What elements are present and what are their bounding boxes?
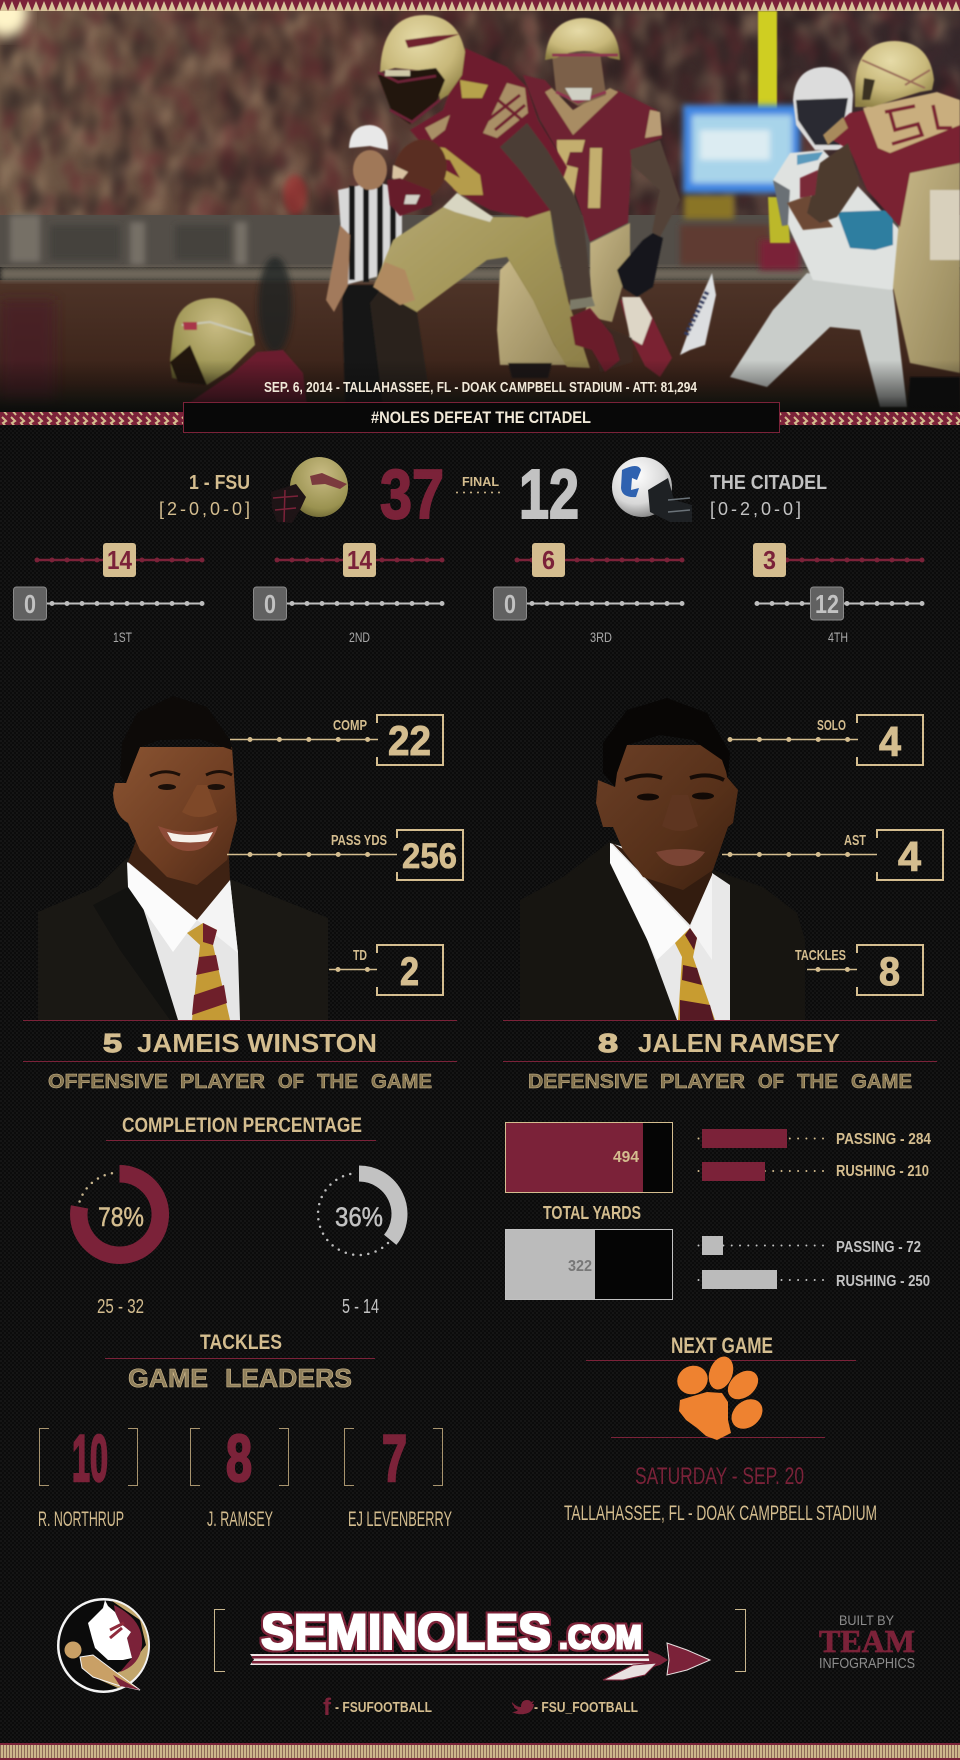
Citadel rushing: RUSHING - 250 <box>836 1273 930 1290</box>
heading: COMPLETION PERCENTAGE <box>122 1114 362 1137</box>
stat: pass yds: 256 <box>402 837 457 876</box>
heading: TACKLES <box>200 1331 282 1354</box>
player name: 5 <box>103 1028 122 1058</box>
panel: next game <box>564 1333 877 1525</box>
Citadel total yards bar <box>506 1230 672 1300</box>
player name <box>503 1020 937 1062</box>
lineman number 54 <box>787 41 960 410</box>
referee <box>326 125 402 410</box>
logo: Seminoles.com wordmark <box>250 1604 710 1680</box>
stat: comp <box>230 715 443 765</box>
stat: ast <box>722 830 943 880</box>
quarter 4: 3 <box>763 545 776 575</box>
social: facebook: f <box>323 1694 332 1721</box>
built by team infographics: TEAM <box>819 1623 915 1659</box>
stat: ast: AST <box>844 832 866 849</box>
headline banner <box>184 402 780 432</box>
bottom fade of photo <box>0 360 960 412</box>
opposing player in white <box>680 67 907 407</box>
donut: FSU 78%: 25 - 32 <box>97 1296 144 1318</box>
bracket right <box>735 1610 746 1672</box>
stat: tackles <box>795 945 923 995</box>
stat: tackles: TACKLES <box>795 947 846 964</box>
top decorative band <box>0 0 960 11</box>
Citadel total yards bar: 322 <box>568 1258 592 1275</box>
quarter 3: 0 <box>504 589 516 619</box>
bottom decorative band <box>0 1743 960 1760</box>
FSU passing <box>698 1129 931 1148</box>
quarter 2: 2ND <box>349 629 370 645</box>
leader: Northrup: 10 <box>72 1421 108 1495</box>
stat: td: 2 <box>400 950 419 994</box>
total yards label: TOTAL YARDS <box>543 1203 641 1223</box>
award title: OF <box>278 1071 304 1093</box>
game leaders subtitle: LEADERS <box>225 1363 352 1393</box>
game info line: SEP. 6, 2014 - TALLAHASSEE, FL - DOAK CAMPBELL STADIUM - ATT: 81,294 <box>264 380 697 396</box>
stat: solo: SOLO <box>817 717 846 734</box>
donut: Citadel 36% <box>318 1173 399 1318</box>
kneeling player <box>170 298 307 407</box>
quarter 3: 6 <box>542 545 555 575</box>
FSU record: [ 2 - 0 , 0 - 0 ] <box>159 499 250 519</box>
award title <box>48 1071 432 1093</box>
donut: Citadel 36%: 5 - 14 <box>342 1296 379 1318</box>
award title: GAME <box>371 1071 432 1093</box>
stat: pass yds <box>227 830 463 880</box>
award title: OFFENSIVE <box>48 1071 168 1093</box>
donut: FSU 78%: 78% <box>98 1202 144 1232</box>
Citadel team label: THE CITADEL <box>710 472 827 494</box>
teammate number 51 in back <box>497 18 680 378</box>
quarter 4: 4TH <box>828 629 848 645</box>
stat: solo: 4 <box>879 718 902 765</box>
Citadel rushing <box>698 1270 930 1290</box>
logo: Seminoles.com wordmark: .COM <box>559 1618 642 1656</box>
icon: Clemson tiger paw <box>673 1353 768 1440</box>
quarter by quarter scores <box>14 543 923 645</box>
quarter 4 <box>753 543 923 645</box>
stat: comp: COMP <box>333 717 367 734</box>
final label <box>457 474 505 492</box>
runner number 9 <box>370 15 620 407</box>
Citadel passing <box>698 1236 921 1256</box>
photo: Jalen Ramsey <box>520 698 805 1020</box>
social: twitter: - FSU_FOOTBALL <box>534 1700 638 1716</box>
leader: Ramsey: 8 <box>226 1421 252 1495</box>
award title: THE <box>317 1071 358 1093</box>
award title: PLAYER <box>660 1071 746 1093</box>
final label: FINAL <box>462 474 499 489</box>
quarter 1: 0 <box>24 589 36 619</box>
award title: THE <box>797 1071 838 1093</box>
player name <box>23 1020 457 1062</box>
built by team infographics <box>819 1612 915 1672</box>
cleat and shoe <box>590 297 672 377</box>
hero photo: players on the field <box>0 0 960 412</box>
panel: total yards <box>506 1122 931 1300</box>
FSU team label: 1 - FSU <box>189 472 250 494</box>
headline banner: #NOLES DEFEAT THE CITADEL <box>371 409 591 427</box>
stat: ast: 4 <box>898 833 922 880</box>
lens flare <box>0 0 28 36</box>
FSU final score: 37 <box>380 455 444 533</box>
stat: td: TD <box>353 947 367 964</box>
game leaders subtitle <box>128 1363 352 1393</box>
award title: GAME <box>851 1071 912 1093</box>
leader: Northrup: R. NORTHRUP <box>38 1508 124 1531</box>
stat: pass yds: PASS YDS <box>331 832 387 849</box>
player name: JALEN RAMSEY <box>638 1028 840 1058</box>
stat: tackles: 8 <box>879 950 900 994</box>
panel: tackle leaders <box>38 1331 452 1531</box>
quarter 4: 12 <box>815 589 839 619</box>
quarter 3: 3RD <box>590 629 612 645</box>
leader: Levenberry: 7 <box>382 1421 407 1495</box>
middle decorative band left <box>0 412 184 425</box>
goal post <box>758 11 790 243</box>
FSU helmet icon <box>271 457 348 523</box>
social: facebook: - FSUFOOTBALL <box>335 1700 432 1716</box>
quarter 1 <box>14 543 203 645</box>
player name: JAMEIS WINSTON <box>137 1028 377 1058</box>
award title: PLAYER <box>180 1071 266 1093</box>
Citadel record: [ 0 - 2 , 0 - 0 ] <box>710 499 801 519</box>
panel: defensive player <box>503 698 943 1093</box>
quarter 2: 0 <box>264 589 276 619</box>
leader: Levenberry: EJ LEVENBERRY <box>348 1508 452 1531</box>
FSU rushing <box>698 1162 929 1181</box>
bracket left <box>214 1610 225 1672</box>
quarter 1: 1ST <box>113 629 132 645</box>
award title <box>528 1071 912 1093</box>
leader: Ramsey <box>190 1421 288 1531</box>
quarter 2: 14 <box>347 545 372 575</box>
scoreboard <box>683 105 800 193</box>
stadium crowd <box>0 11 960 217</box>
scoreboard <box>159 455 827 533</box>
donut: FSU 78% <box>79 1173 160 1318</box>
Citadel final score: 12 <box>519 455 579 533</box>
heading: NEXT GAME <box>671 1333 773 1358</box>
logo: Seminoles.com wordmark: SEMINOLES <box>261 1604 551 1660</box>
built by team infographics: BUILT BY <box>839 1612 895 1628</box>
FSU passing: PASSING - 284 <box>836 1131 931 1148</box>
award title: OF <box>758 1071 784 1093</box>
built by team infographics: INFOGRAPHICS <box>819 1656 915 1672</box>
game leaders subtitle: GAME <box>128 1363 208 1393</box>
footer <box>57 1598 915 1721</box>
Citadel helmet icon <box>612 457 692 522</box>
panel: offensive player <box>23 696 463 1093</box>
Citadel passing: PASSING - 72 <box>836 1239 921 1256</box>
panel: completion percentage <box>79 1114 399 1318</box>
award title: DEFENSIVE <box>528 1071 648 1093</box>
fence and wall <box>0 195 960 410</box>
leader: Northrup <box>38 1421 138 1531</box>
FSU total yards bar <box>506 1122 672 1192</box>
quarter 2 <box>254 543 443 645</box>
donut: Citadel 36%: 36% <box>335 1202 383 1232</box>
FSU total yards bar: 494 <box>613 1149 639 1166</box>
stat: solo <box>730 715 923 765</box>
FSU rushing: RUSHING - 210 <box>836 1163 929 1180</box>
social: facebook <box>323 1694 432 1721</box>
leader: Levenberry <box>344 1421 452 1531</box>
photo: Jameis Winston <box>38 696 328 1020</box>
heading <box>586 1333 856 1438</box>
leader: Ramsey: J. RAMSEY <box>207 1508 273 1531</box>
stat: comp: 22 <box>388 717 431 764</box>
next game date: SATURDAY - SEP. 20 <box>635 1463 804 1490</box>
player name: 8 <box>598 1028 618 1058</box>
quarter 3 <box>494 543 683 645</box>
logo: Seminole head <box>57 1598 150 1693</box>
stat: td <box>329 945 443 995</box>
middle decorative band right <box>779 412 960 425</box>
quarter 1: 14 <box>107 545 132 575</box>
